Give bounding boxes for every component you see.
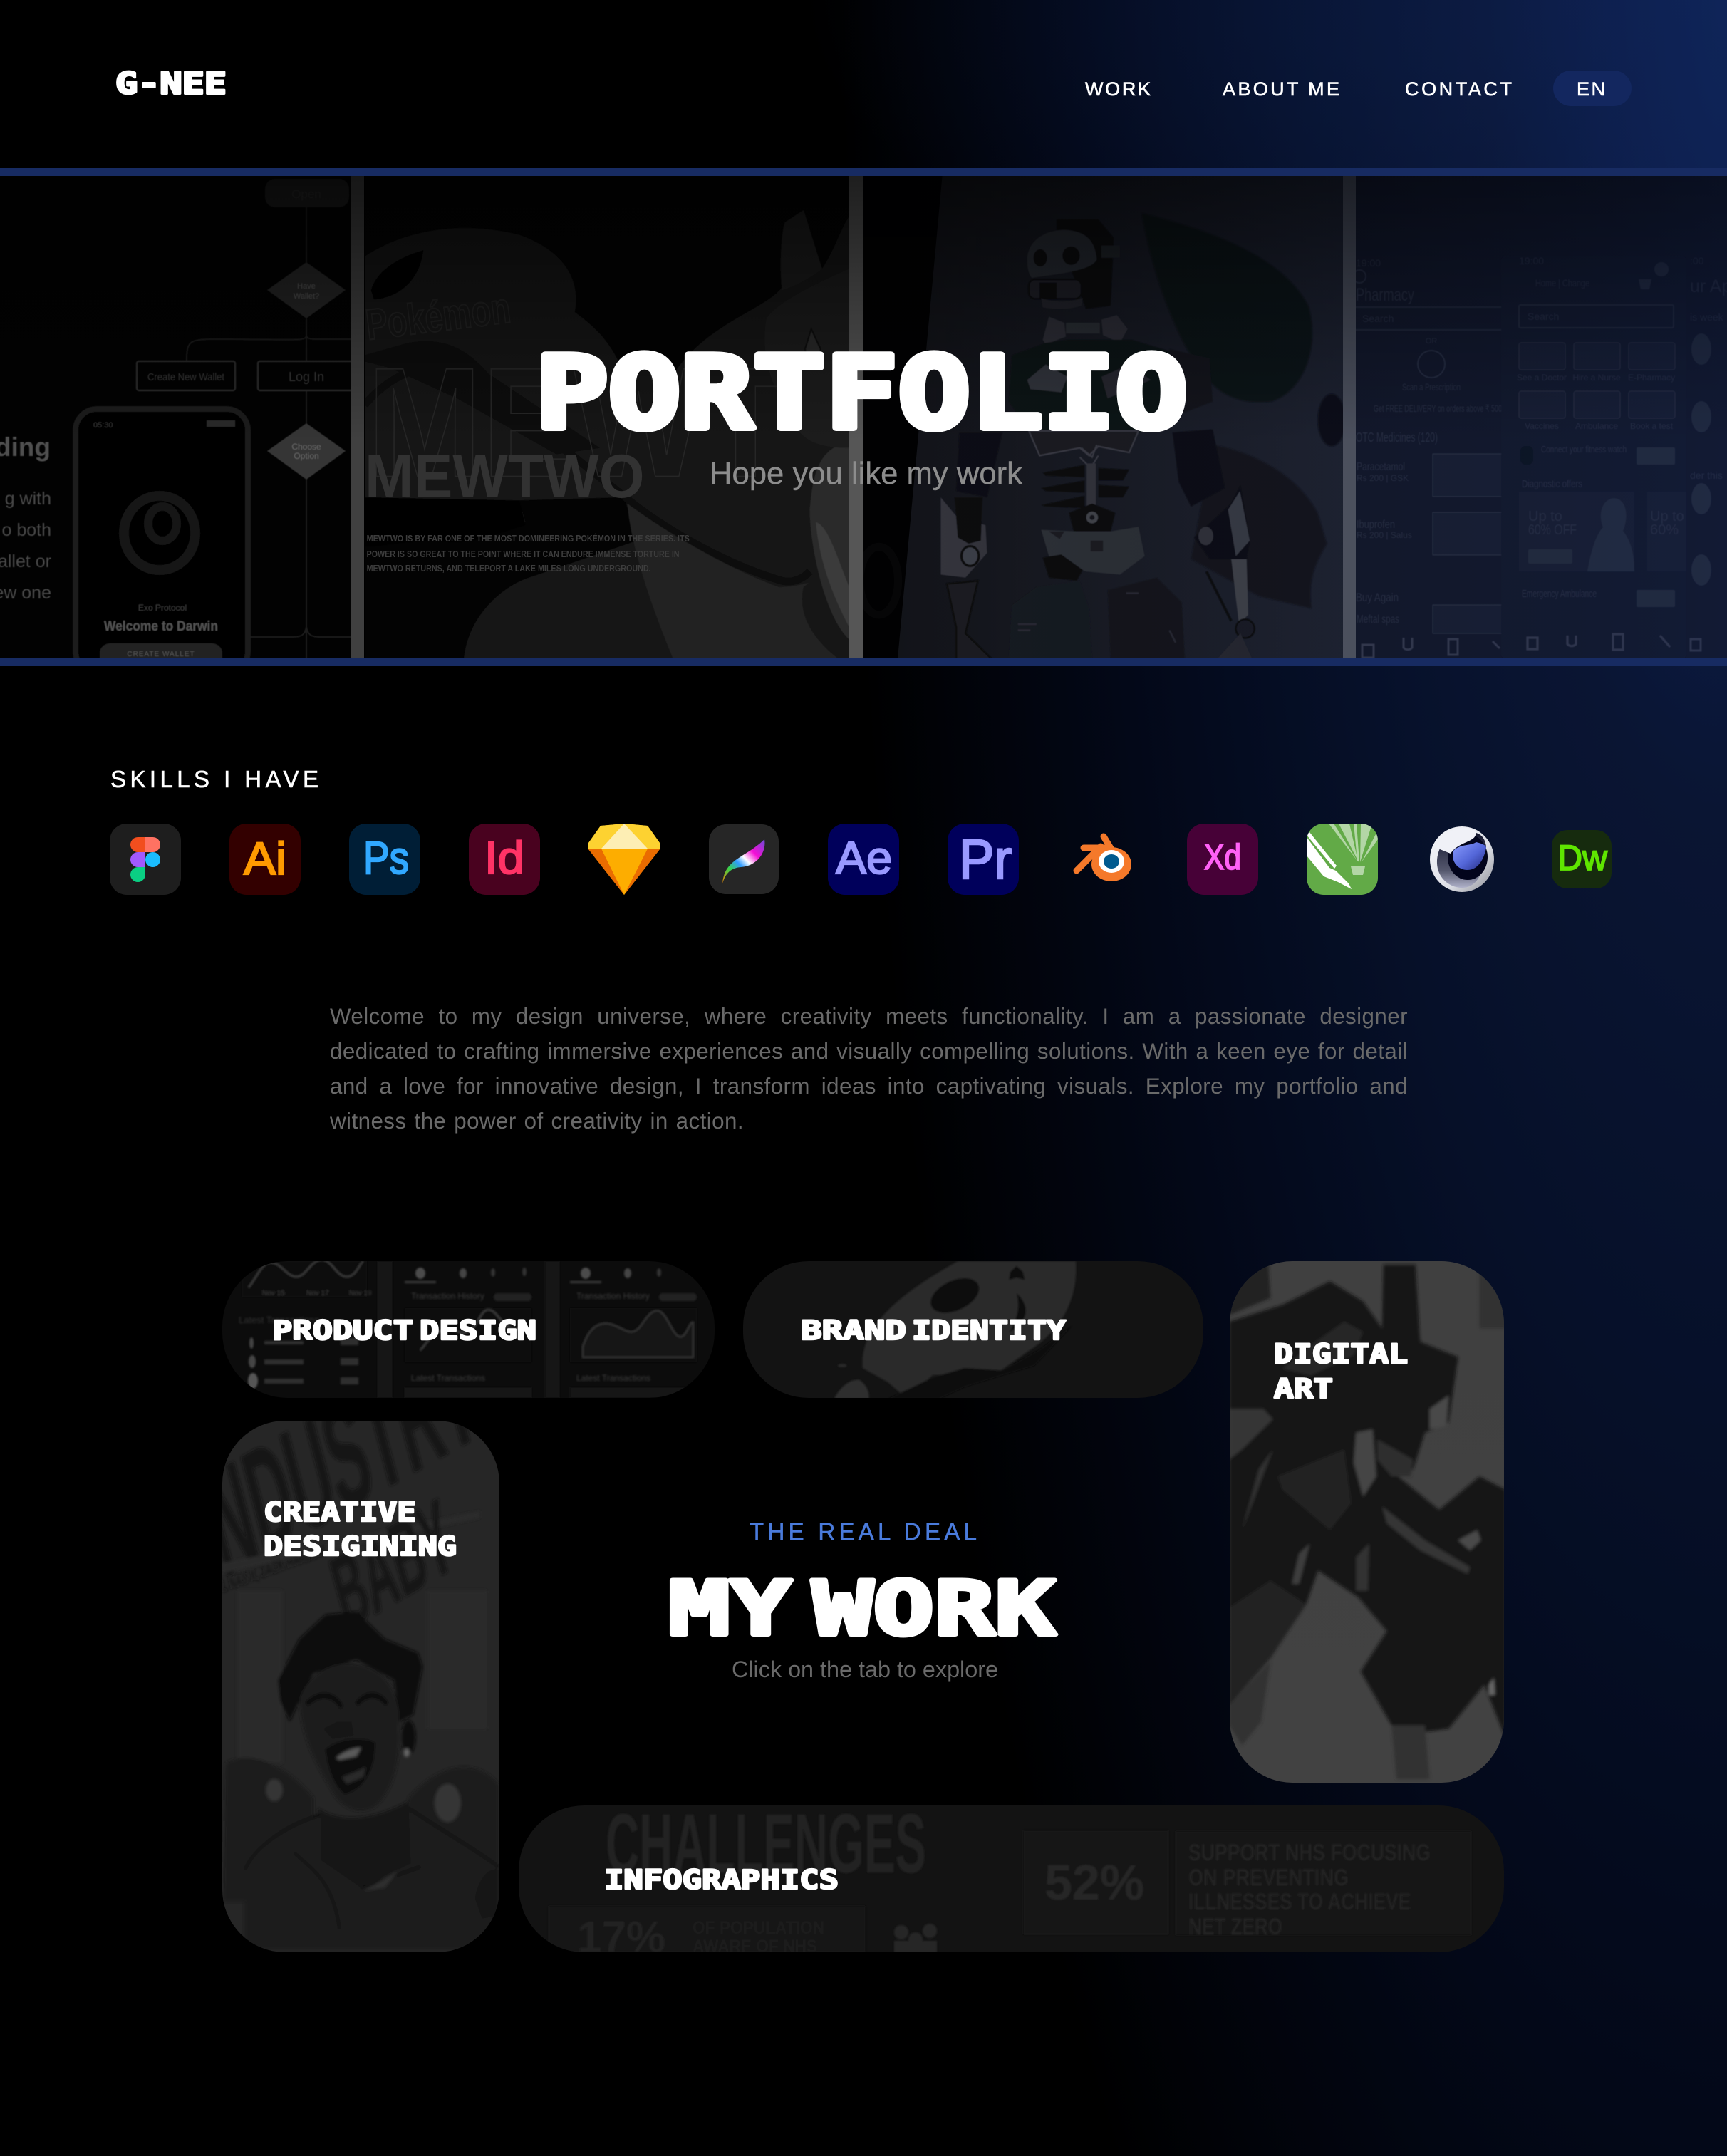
app screen 2: 19:00 [1519, 255, 1544, 266]
icon: Procreate [709, 824, 779, 894]
label: infographics: INFOGRAPHICS [604, 1864, 839, 1895]
hero image: wallet flowchart: g with [5, 489, 51, 509]
hero image: pharmacy app screens [1351, 176, 1727, 658]
hero image: wallet flowchart: Option [294, 451, 319, 461]
hero image: wallet flowchart: Exo Protocol [138, 603, 187, 613]
app screen 2: E-Pharmacy [1628, 373, 1675, 383]
section eyebrow: the real deal: THE REAL DEAL [750, 1518, 977, 1545]
app screen 1: OR [1426, 337, 1437, 346]
icon: Dreamweaver: Dw [1557, 838, 1608, 878]
card: product design [222, 1260, 715, 1398]
hero section [0, 168, 1727, 673]
icon: Sketch [588, 824, 660, 895]
card: product design: Latest Transactions [239, 1315, 319, 1325]
app screen 3: der this [1690, 470, 1723, 481]
app screen 1: Scan a Prescription [1402, 381, 1461, 393]
app screen 2: Ambulance [1575, 421, 1618, 431]
app screen 1: Rs 200 | Salus [1357, 530, 1412, 540]
hero image: wallet flowchart [0, 176, 358, 673]
icon: Photoshop [349, 824, 420, 895]
hero image: robot skeleton [860, 176, 1346, 660]
icon: Adobe XD: Xd [1204, 837, 1241, 877]
section heading: my work: WORK [812, 1565, 1056, 1652]
hero subtitle: Hope you like my work [710, 456, 1023, 491]
card: infographics: ON PREVENTING [1188, 1865, 1349, 1890]
label: brand identity: BRAND [801, 1315, 906, 1346]
app screen 2: Up to [1528, 509, 1562, 524]
label: creative designing: DESIGINING [264, 1530, 457, 1562]
hero top band [0, 168, 1727, 176]
hero image: wallet flowchart: Log In [289, 370, 324, 384]
app screen 2: 60% [1650, 522, 1679, 538]
card: infographics: NET ZERO [1188, 1914, 1282, 1939]
app screen 1 [1351, 257, 1504, 658]
hero divider 3 [1343, 176, 1356, 658]
label: creative designing: CREATIVE [264, 1496, 416, 1528]
app screen 2: Emergency Ambulance [1522, 588, 1597, 600]
section heading: my work [668, 1565, 1056, 1652]
card: infographics: 17% [577, 1913, 665, 1962]
icon: InDesign [469, 824, 540, 895]
icon: After Effects: Ae [836, 832, 892, 883]
icon: Blender [1077, 836, 1131, 881]
card: infographics: SUPPORT NHS FOCUSING [1188, 1840, 1431, 1865]
app screen 1: Ibuprofen [1357, 519, 1395, 531]
icon: Photoshop: Ps [363, 832, 409, 883]
label: product design: DESIGN [420, 1315, 536, 1346]
icon: InDesign: Id [484, 832, 524, 883]
icon: Premiere Pro [948, 824, 1019, 895]
app screen 1: Search [1362, 313, 1394, 324]
hero image: wallet flowchart: Have [297, 282, 316, 291]
hero image: wallet flowchart: Wallet? [294, 292, 319, 301]
hero top fade overlay [0, 176, 1727, 658]
work section [175, 1260, 1505, 1962]
hero image: Mewtwo poster: MEWTWO RETURNS, AND TELEPORT A LAKE MILES LONG UNDERGROUND. [367, 563, 651, 574]
app screen 2: See a Doctor [1517, 373, 1567, 383]
card: product design: Nov 17 [306, 1290, 329, 1297]
label: creative designing [264, 1496, 457, 1562]
intro paragraph: dedicated to crafting immersive experiences and visually compelling solutions. With a keen eye for detail [330, 1039, 1408, 1064]
app screen 2: Vaccines [1525, 421, 1559, 431]
icon: Dreamweaver [1552, 830, 1612, 888]
nav link: work: WORK [1085, 78, 1151, 100]
card: product design: Nov 19 [349, 1290, 372, 1297]
app screen 1: 19:00 [1356, 257, 1381, 269]
icon: Illustrator: Ai [244, 833, 286, 884]
card: creative designing: BABY [321, 1477, 464, 1654]
hero bottom band [0, 658, 1727, 666]
hero divider 1 [351, 176, 364, 658]
card: product design: Latest Transactions [576, 1373, 650, 1383]
icon: Figma [110, 824, 181, 895]
label: brand identity [801, 1315, 1066, 1346]
app screen 1: OTC Medicines (120) [1356, 430, 1438, 445]
card: product design: Nov 15 [262, 1290, 285, 1297]
hero image: wallet flowchart: 05:30 [93, 421, 113, 430]
card: infographics: OF POPULATION [693, 1918, 824, 1938]
label: product design [272, 1315, 536, 1346]
hero image: wallet flowchart: CREATE WALLET [127, 651, 195, 658]
section hint text: Click on the tab to explore [732, 1657, 998, 1682]
intro paragraph: and a love for innovative design, I transform ideas into captivating visuals. Explore my portfolio and [330, 1074, 1408, 1099]
hero image: wallet flowchart: o both [1, 520, 51, 540]
intro paragraph [330, 1004, 1408, 1134]
app screen 3 [1690, 255, 1727, 651]
app screen 2: 60% OFF [1528, 522, 1577, 538]
skills icon row [110, 824, 1612, 895]
card: infographics [519, 1797, 1504, 1962]
app screen 2: Connect your fitness watch [1541, 444, 1627, 455]
app screen 2: Diagnostic offers [1522, 478, 1582, 490]
hero image: Mewtwo poster: POWER IS SO GREAT TO THE POINT WHERE IT CAN ENDURE IMMENSE TORTURE IN [367, 549, 680, 559]
hero divider 2 [849, 176, 864, 658]
icon: After Effects [828, 824, 899, 895]
label: brand identity: IDENTITY [912, 1315, 1066, 1346]
skills heading: SKILLS I HAVE [110, 766, 318, 792]
app screen 3: :00 [1690, 255, 1704, 266]
hero image: Mewtwo poster: Pokémon [363, 283, 513, 349]
hero backdrop [0, 176, 1727, 658]
logo: G-NEE: G-NEE [115, 66, 227, 101]
card: creative designing: L NAS X, JACK HARLOW [220, 1540, 327, 1596]
language pill: EN: EN [1577, 78, 1605, 100]
intro paragraph: witness the power of creativity in action. [330, 1109, 744, 1134]
hero colour tint overlay [0, 176, 1727, 658]
hero image: wallet flowchart: Create New Wallet [147, 371, 225, 383]
app screen 1: Paracetamol [1357, 461, 1405, 473]
card: product design: Latest Transactions [411, 1373, 485, 1383]
card: product design: Transaction History [411, 1291, 484, 1301]
app screen 1: Meftal spas [1357, 613, 1399, 626]
hero image: wallet flowchart: Choose [291, 442, 321, 452]
card: infographics: ILLNESSES TO ACHIEVE [1188, 1889, 1411, 1914]
navigation [1085, 71, 1632, 106]
card: infographics: 52% [1044, 1855, 1144, 1910]
app screen 3: is week [1690, 311, 1724, 323]
card: product design: Transaction History [576, 1291, 650, 1301]
icon: Cinema 4D [1430, 826, 1494, 892]
card: infographics: CHALLENGES [606, 1797, 926, 1891]
app screen 2: Search [1528, 311, 1559, 322]
app screen 1: Rs 200 | GSK [1357, 473, 1409, 483]
hero image: Mewtwo poster [363, 176, 849, 660]
app screen 2: Book a test [1630, 421, 1674, 431]
section heading: my work: MY [668, 1565, 792, 1652]
hero title: PORTFOLIO [536, 335, 1188, 452]
app screen 2: Hire a Nurse [1572, 373, 1621, 383]
hero image: Mewtwo poster: MEWTWO IS BY FAR ONE OF THE MOST DOMINEERING POKÉMON IN THE SERIES. ITS [367, 533, 690, 544]
card: infographics: AWARE OF NHS [693, 1937, 817, 1957]
intro paragraph: Welcome to my design universe, where creativity meets functionality. I am a passionate designer [330, 1004, 1408, 1029]
nav link: contact: CONTACT [1405, 78, 1512, 100]
card: creative designing: INDUSTRY [175, 1305, 492, 1617]
icon: Premiere Pro: Pr [959, 828, 1012, 891]
label: product design: PRODUCT [272, 1315, 413, 1346]
app screen 2: Home | Change [1535, 277, 1589, 289]
card: creative designing [175, 1305, 499, 1952]
icon: CorelDRAW [1307, 824, 1378, 895]
language pill: EN [1553, 71, 1632, 106]
app screen 2: Up to [1650, 509, 1684, 524]
hero image: wallet flowchart: Open [291, 187, 321, 201]
hero image: Mewtwo poster: MEWTWO [365, 442, 644, 511]
nav link: about me: ABOUT ME [1223, 78, 1339, 100]
app screen 2 [1501, 255, 1686, 658]
app screen 1: Buy Again [1356, 591, 1399, 604]
icon: Adobe XD [1187, 824, 1258, 895]
label: digital art [1274, 1338, 1408, 1404]
hero image: wallet flowchart: Welcome to Darwin [104, 619, 218, 634]
label: digital art: DIGITAL [1274, 1338, 1408, 1369]
app screen 1: Get FREE DELIVERY on orders above ₹ 500 [1374, 403, 1502, 414]
hero image: Mewtwo poster: MEWT [367, 336, 787, 510]
icon: Illustrator [229, 824, 301, 895]
card: brand identity [743, 1261, 1203, 1399]
card: digital art [1229, 1261, 1505, 1783]
label: digital art: ART [1274, 1373, 1333, 1404]
app screen 1: Pharmacy [1356, 285, 1414, 305]
